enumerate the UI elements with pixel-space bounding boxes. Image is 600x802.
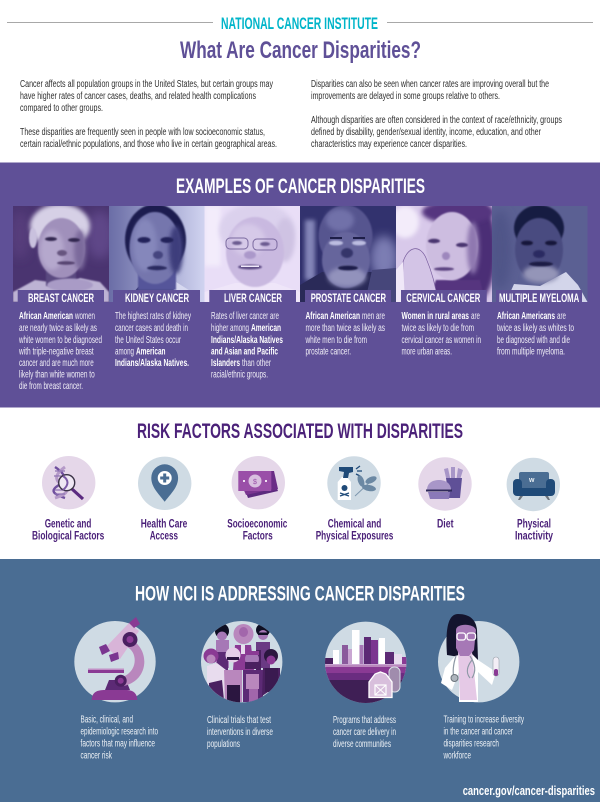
text: training: workforce bbox=[443, 750, 471, 761]
title: What Are Cancer Disparities? bbox=[180, 37, 421, 64]
intro text: left column: have higher rates of cancer cases, deaths, and related health complications bbox=[20, 91, 256, 102]
text: liver cancer: racial/ethnic groups. bbox=[211, 370, 268, 380]
photo: breast cancer bbox=[10, 204, 114, 302]
intro text: left column: These disparities are frequently seen in people with low socioeconomic status, bbox=[20, 127, 265, 138]
label: Biological Factors bbox=[32, 529, 104, 542]
text: kidney cancer: cancer cases and death in bbox=[115, 323, 188, 334]
text: clinical trials bbox=[207, 715, 273, 750]
text: multiple myeloma: African Americans bbox=[497, 311, 555, 322]
text: prostate cancer: white men to die from bbox=[305, 335, 367, 346]
label bbox=[141, 517, 188, 542]
text: liver cancer: Rates of liver cancer are bbox=[211, 311, 279, 322]
label: breast cancer: BREAST CANCER bbox=[28, 291, 94, 305]
label: Socioeconomic bbox=[227, 517, 288, 530]
icon: group of diverse people bbox=[201, 621, 282, 703]
icon: burger and fries bbox=[418, 457, 472, 511]
text: cervical cancer: Women in rural areas bbox=[402, 311, 469, 322]
label: Access bbox=[150, 529, 178, 542]
text: liver cancer: Indians/Alaska Natives bbox=[211, 335, 283, 346]
photo: kidney cancer bbox=[109, 204, 204, 302]
icon: doctor with test tube bbox=[438, 614, 519, 702]
photo: prostate cancer bbox=[300, 205, 398, 302]
intro text: right column: characteristics may experience cancer disparities. bbox=[311, 139, 467, 150]
intro text: right column bbox=[311, 79, 562, 150]
text: breast cancer: white women to be diagnosed bbox=[18, 335, 102, 346]
text: training: disparities research bbox=[444, 739, 499, 750]
icon: money stack: $ bbox=[253, 479, 257, 486]
text: research: cancer risk bbox=[80, 750, 112, 761]
intro text: left column: Cancer affects all population groups in the United States, but certain groups may bbox=[20, 79, 273, 90]
risk factor: chemical and physical exposures bbox=[316, 456, 393, 542]
risk factor: physical inactivity bbox=[507, 458, 560, 542]
label: Physical bbox=[517, 517, 551, 530]
text: programs bbox=[333, 715, 396, 750]
text: kidney cancer: American bbox=[136, 346, 166, 358]
intro text: left column bbox=[20, 79, 277, 150]
text: research: Basic, clinical, and bbox=[80, 715, 133, 726]
text: research: epidemiologic research into bbox=[80, 727, 158, 738]
text: clinical trials: interventions in diverse bbox=[207, 727, 273, 738]
label: Diet bbox=[437, 517, 454, 530]
label: Health Care bbox=[141, 517, 188, 530]
panel: examples of cancer disparities bbox=[0, 162, 600, 408]
icon: spray bottle and leaf bbox=[327, 456, 381, 510]
label bbox=[227, 517, 288, 542]
text: kidney cancer: among bbox=[115, 346, 134, 358]
text: training: Training to increase diversity bbox=[444, 715, 524, 726]
label: Chemical and bbox=[328, 517, 381, 530]
text: breast cancer: die from breast cancer. bbox=[19, 381, 83, 392]
text: breast cancer: with triple-negative breast bbox=[18, 346, 94, 358]
text: multiple myeloma: from multiple myeloma. bbox=[497, 346, 565, 358]
text: breast cancer: women bbox=[74, 311, 95, 322]
label bbox=[32, 517, 104, 542]
text: cervical cancer: cervical cancer as women in bbox=[402, 335, 481, 346]
text: prostate cancer: more than twice as likely as bbox=[306, 323, 385, 334]
icon: city and rural barn bbox=[325, 622, 407, 704]
photo: liver cancer bbox=[204, 203, 300, 302]
label: liver cancer: LIVER CANCER bbox=[224, 291, 282, 305]
text: breast cancer: likely than white women to bbox=[19, 370, 95, 380]
label: prostate cancer: PROSTATE CANCER bbox=[311, 291, 386, 305]
label: cervical cancer: CERVICAL CANCER bbox=[406, 291, 481, 305]
text: breast cancer: African American bbox=[19, 311, 73, 322]
text: prostate cancer: men are bbox=[362, 311, 385, 322]
text: kidney cancer: The highest rates of kidney bbox=[115, 311, 191, 322]
text: prostate cancer bbox=[305, 311, 385, 358]
text: liver cancer bbox=[211, 311, 283, 380]
intro text: left column: compared to other groups. bbox=[20, 103, 103, 114]
text: clinical trials: Clinical trials that test bbox=[207, 715, 271, 726]
text: programs: cancer care delivery in bbox=[333, 727, 396, 738]
label: Factors bbox=[243, 529, 273, 542]
text: liver cancer: Islanders bbox=[211, 358, 240, 369]
text: breast cancer: cancer and are much more bbox=[19, 358, 94, 369]
text: cervical cancer: more urban areas. bbox=[402, 346, 452, 358]
risk factor: health care access bbox=[138, 457, 191, 542]
text: prostate cancer: prostate cancer. bbox=[306, 346, 351, 358]
text: liver cancer: and Asian and Pacific bbox=[211, 346, 278, 358]
text: cervical cancer: twice as likely to die from bbox=[402, 323, 474, 334]
risk factor: diet bbox=[418, 457, 472, 530]
intro text: left column: certain racial/ethnic populations, and those who live in certain geographical areas. bbox=[20, 139, 277, 150]
text: cervical cancer bbox=[402, 311, 481, 358]
label bbox=[316, 517, 393, 542]
label bbox=[515, 517, 553, 542]
label: Inactivity bbox=[515, 529, 553, 542]
intro text: right column: improvements are delayed in some groups relative to others. bbox=[311, 91, 500, 102]
photo: cervical cancer bbox=[396, 206, 492, 302]
text: multiple myeloma bbox=[497, 311, 574, 358]
text: cervical cancer: are bbox=[471, 311, 480, 322]
label: Physical Exposures bbox=[316, 529, 393, 542]
text: research: factors that may influence bbox=[80, 739, 155, 750]
icon: couch: w bbox=[528, 477, 535, 484]
text: training: in the cancer and cancer bbox=[444, 727, 513, 738]
header: National Cancer Institute: NATIONAL CANCER INSTITUTE bbox=[221, 14, 378, 33]
text: kidney cancer bbox=[115, 311, 191, 369]
panel: how NCI is addressing cancer disparities bbox=[0, 559, 600, 802]
text: programs: Programs that address bbox=[333, 715, 396, 726]
text: clinical trials: populations bbox=[207, 739, 240, 750]
text: breast cancer bbox=[18, 311, 102, 392]
label bars: cancer types bbox=[18, 290, 582, 303]
text: liver cancer: than other bbox=[242, 358, 271, 369]
label: Genetic and bbox=[45, 517, 91, 530]
risk factor: socioeconomic factors bbox=[227, 456, 288, 542]
icon: microscope bbox=[74, 617, 156, 702]
text: multiple myeloma: are bbox=[557, 311, 566, 322]
text: liver cancer: higher among bbox=[211, 323, 249, 334]
icon: map pin with cross bbox=[138, 457, 191, 510]
photo: multiple myeloma bbox=[488, 205, 588, 302]
text: breast cancer: are nearly twice as likely as bbox=[19, 323, 97, 334]
text: kidney cancer: Indians/Alaska Natives. bbox=[115, 358, 189, 369]
text: programs: diverse communities bbox=[333, 739, 391, 750]
text: liver cancer: American bbox=[251, 323, 281, 334]
heading: examples: EXAMPLES OF CANCER DISPARITIES bbox=[176, 175, 425, 198]
icon: DNA with magnifier bbox=[42, 456, 95, 509]
text: training bbox=[443, 715, 524, 761]
label: kidney cancer: KIDNEY CANCER bbox=[125, 291, 189, 305]
text: research bbox=[80, 715, 158, 761]
text: prostate cancer: African American bbox=[306, 311, 360, 322]
risk factor: genetic and biological factors bbox=[32, 456, 104, 542]
text: kidney cancer: the United States occur bbox=[115, 335, 181, 346]
